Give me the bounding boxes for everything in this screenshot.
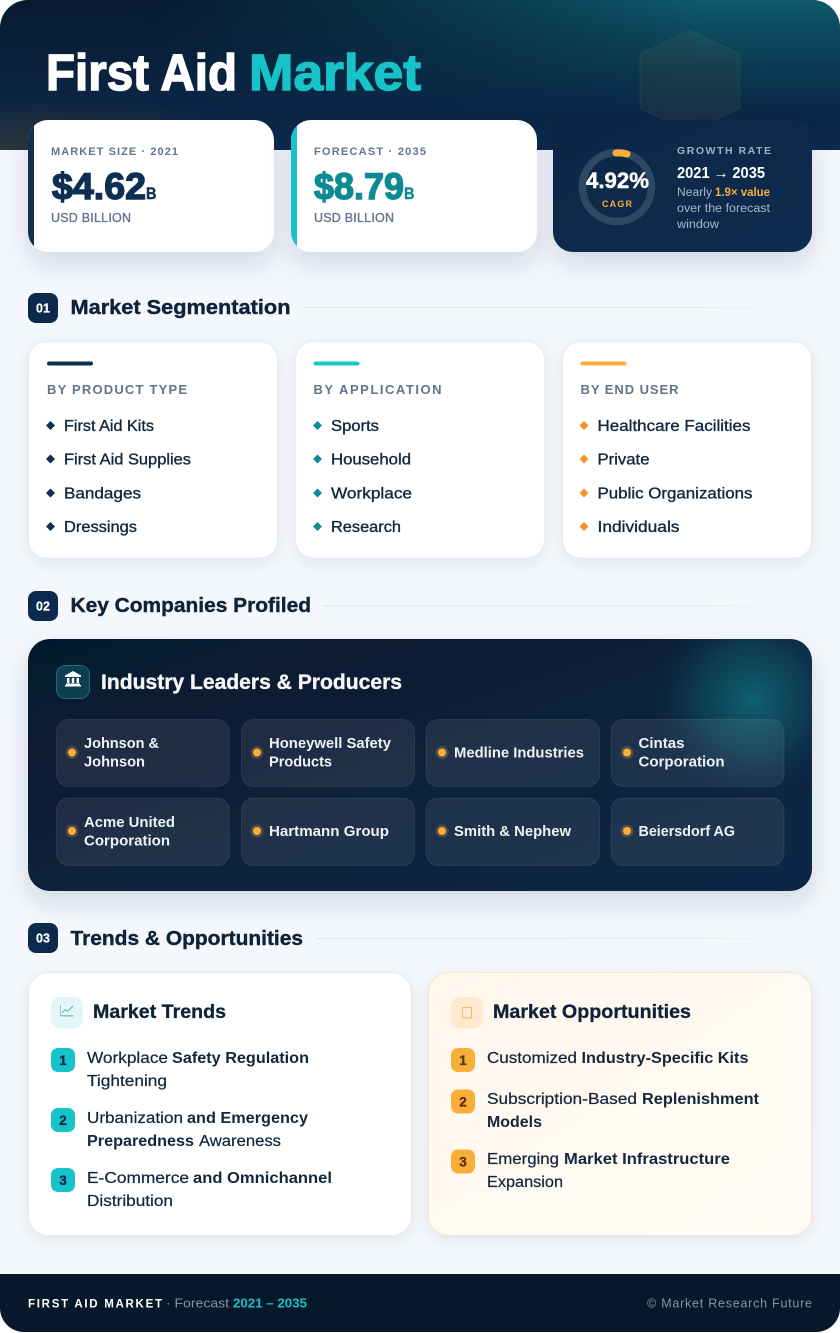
section heading 01: Market Segmentation: [70, 296, 290, 319]
stat card: market size 2021: $4.62: [52, 166, 146, 207]
list: applications: [313, 418, 412, 536]
opportunity 3: Emerging: [487, 1151, 559, 1168]
donut gauge: 4.92%: [586, 168, 649, 193]
stat card: CAGR growth rate: [553, 120, 812, 252]
trend 3: E-Commerce: [87, 1170, 189, 1187]
opportunity 3: Expansion: [487, 1174, 563, 1191]
opportunity 1: [451, 1048, 748, 1072]
opportunity 2: 2: [459, 1094, 467, 1110]
section heading 02: 02: [36, 600, 50, 614]
list: applications: Research: [331, 519, 401, 536]
panel heading: Industry Leaders & Producers: [101, 671, 402, 694]
list: applications: Sports: [331, 418, 379, 435]
trend 1: Safety Regulation: [172, 1050, 309, 1067]
company: Beiersdorf AG: Beiersdorf AG: [638, 824, 735, 840]
stat card: forecast 2035: [291, 120, 537, 252]
panel: by product type: [28, 342, 278, 558]
growth text: window: [676, 219, 720, 231]
trend 3: Distribution: [87, 1193, 173, 1210]
stat card: forecast 2035: B: [404, 184, 414, 203]
icon: line chart: [51, 997, 83, 1028]
panel: key companies: [28, 639, 812, 891]
panel: by end user: BY END USER: [580, 382, 679, 397]
opportunity 2: Subscription-Based: [487, 1091, 637, 1108]
section heading 02: Key Companies Profiled: [70, 594, 311, 617]
stat card: forecast 2035: $8.79: [314, 166, 404, 207]
company: Honeywell Safety Products: [242, 720, 414, 786]
stat card: market size 2021: [28, 120, 274, 252]
list: end users: [580, 418, 753, 536]
company: Acme United Corporation: Corporation: [84, 834, 170, 850]
list: end users: Private: [598, 452, 650, 468]
list: end users: Healthcare Facilities: [598, 418, 751, 435]
company: Hartmann Group: Hartmann Group: [269, 824, 389, 840]
opportunity 1: 1: [459, 1053, 467, 1068]
list: applications: Household: [331, 452, 411, 468]
growth text: 1.9× value: [715, 187, 770, 199]
title: Market: [249, 44, 421, 101]
company: Medline Industries: Medline Industries: [454, 746, 584, 762]
company: Cintas Corporation: [611, 720, 784, 786]
opportunity 2: Replenishment: [642, 1091, 759, 1108]
trend 1: Tightening: [87, 1073, 167, 1090]
company: Beiersdorf AG: [611, 798, 784, 866]
growth text: 2021 → 2035: [677, 165, 765, 182]
opportunity 2: [451, 1090, 759, 1131]
company: Cintas Corporation: Cintas: [638, 736, 684, 752]
list: product types: Dressings: [64, 519, 137, 536]
stat card: forecast 2035: USD BILLION: [314, 211, 394, 225]
company: Johnson & Johnson: Johnson: [84, 754, 145, 770]
trend 2: Urbanization: [87, 1110, 183, 1127]
section heading 03: [28, 923, 793, 953]
panel: by product type: BY PRODUCT TYPE: [47, 382, 187, 397]
opportunity 2: Models: [487, 1114, 542, 1131]
footer: [0, 1274, 840, 1332]
trend 2: and Emergency: [187, 1110, 308, 1127]
header band: [0, 0, 840, 150]
opportunity 3: Market Infrastructure: [564, 1151, 730, 1168]
company: Acme United Corporation: [56, 798, 230, 866]
growth text: GROWTH RATE: [677, 145, 771, 157]
footer: · Forecast: [166, 1296, 230, 1310]
list: product types: First Aid Supplies: [64, 452, 191, 468]
list: product types: First Aid Kits: [64, 418, 154, 435]
trend 2: Awareness: [199, 1133, 281, 1150]
section heading 03: Trends & Opportunities: [70, 927, 303, 950]
opportunity 3: [451, 1150, 730, 1191]
trend 1: [51, 1048, 309, 1090]
title: [46, 44, 421, 101]
panel: by application: BY APPLICATION: [314, 382, 442, 397]
heading: Market Opportunities: [493, 1001, 691, 1023]
company: Johnson & Johnson: [56, 720, 230, 786]
list: applications: Workplace: [331, 486, 412, 502]
footer: 2021 – 2035: [233, 1296, 307, 1310]
trend 3: [51, 1168, 332, 1210]
trend 3: and Omnichannel: [193, 1170, 332, 1187]
section heading 01: [28, 293, 793, 323]
opportunity 1: Industry-Specific Kits: [582, 1050, 748, 1067]
footer: © Market Research Future: [647, 1296, 812, 1310]
trend 1: 1: [59, 1053, 67, 1068]
list: product types: [46, 418, 191, 536]
footer: FIRST AID MARKET: [28, 1298, 162, 1310]
panel: by end user: [562, 342, 812, 558]
company: Acme United Corporation: Acme United: [84, 815, 175, 831]
section heading 01: 01: [36, 302, 50, 316]
panel: market opportunities: [428, 972, 812, 1236]
panel: by application: [296, 342, 544, 558]
donut gauge: [582, 152, 652, 222]
trend 2: 2: [59, 1113, 67, 1128]
opportunity 1: Customized: [487, 1050, 577, 1067]
donut gauge: CAGR: [602, 199, 632, 209]
list: end users: Public Organizations: [598, 486, 753, 502]
growth text: Nearly: [677, 187, 712, 199]
company: Medline Industries: [426, 720, 600, 786]
heading: Market Trends: [93, 1001, 226, 1023]
title: First Aid: [46, 44, 237, 101]
panel: market trends: [28, 972, 412, 1236]
company: Cintas Corporation: Corporation: [638, 754, 724, 770]
icon: institution building: [56, 666, 90, 698]
company: Smith & Nephew: Smith & Nephew: [454, 824, 572, 840]
icon: placeholder glyph: [451, 997, 483, 1028]
growth text: over the forecast: [677, 203, 771, 215]
trend 3: 3: [59, 1173, 67, 1188]
list: end users: Individuals: [598, 519, 680, 536]
company: Honeywell Safety Products: Products: [269, 754, 332, 770]
company: Hartmann Group: [242, 798, 414, 866]
stat card: market size 2021: MARKET SIZE · 2021: [51, 146, 178, 158]
section heading 02: [28, 591, 793, 621]
stat card: market size 2021: USD BILLION: [51, 211, 131, 225]
list: product types: Bandages: [64, 486, 141, 502]
opportunity 3: 3: [459, 1154, 467, 1170]
company: Johnson & Johnson: Johnson &: [84, 736, 160, 752]
company: Smith & Nephew: [426, 798, 600, 866]
stat card: forecast 2035: FORECAST · 2035: [314, 146, 426, 158]
section heading 03: 03: [36, 932, 50, 946]
trend 2: Preparedness: [87, 1133, 194, 1150]
company: Honeywell Safety Products: Honeywell Safety: [269, 736, 391, 752]
decorative hexagon: [640, 30, 740, 132]
trend 2: [51, 1108, 308, 1150]
growth text: [676, 145, 771, 231]
trend 1: Workplace: [87, 1050, 168, 1067]
stat card: market size 2021: B: [146, 184, 156, 203]
